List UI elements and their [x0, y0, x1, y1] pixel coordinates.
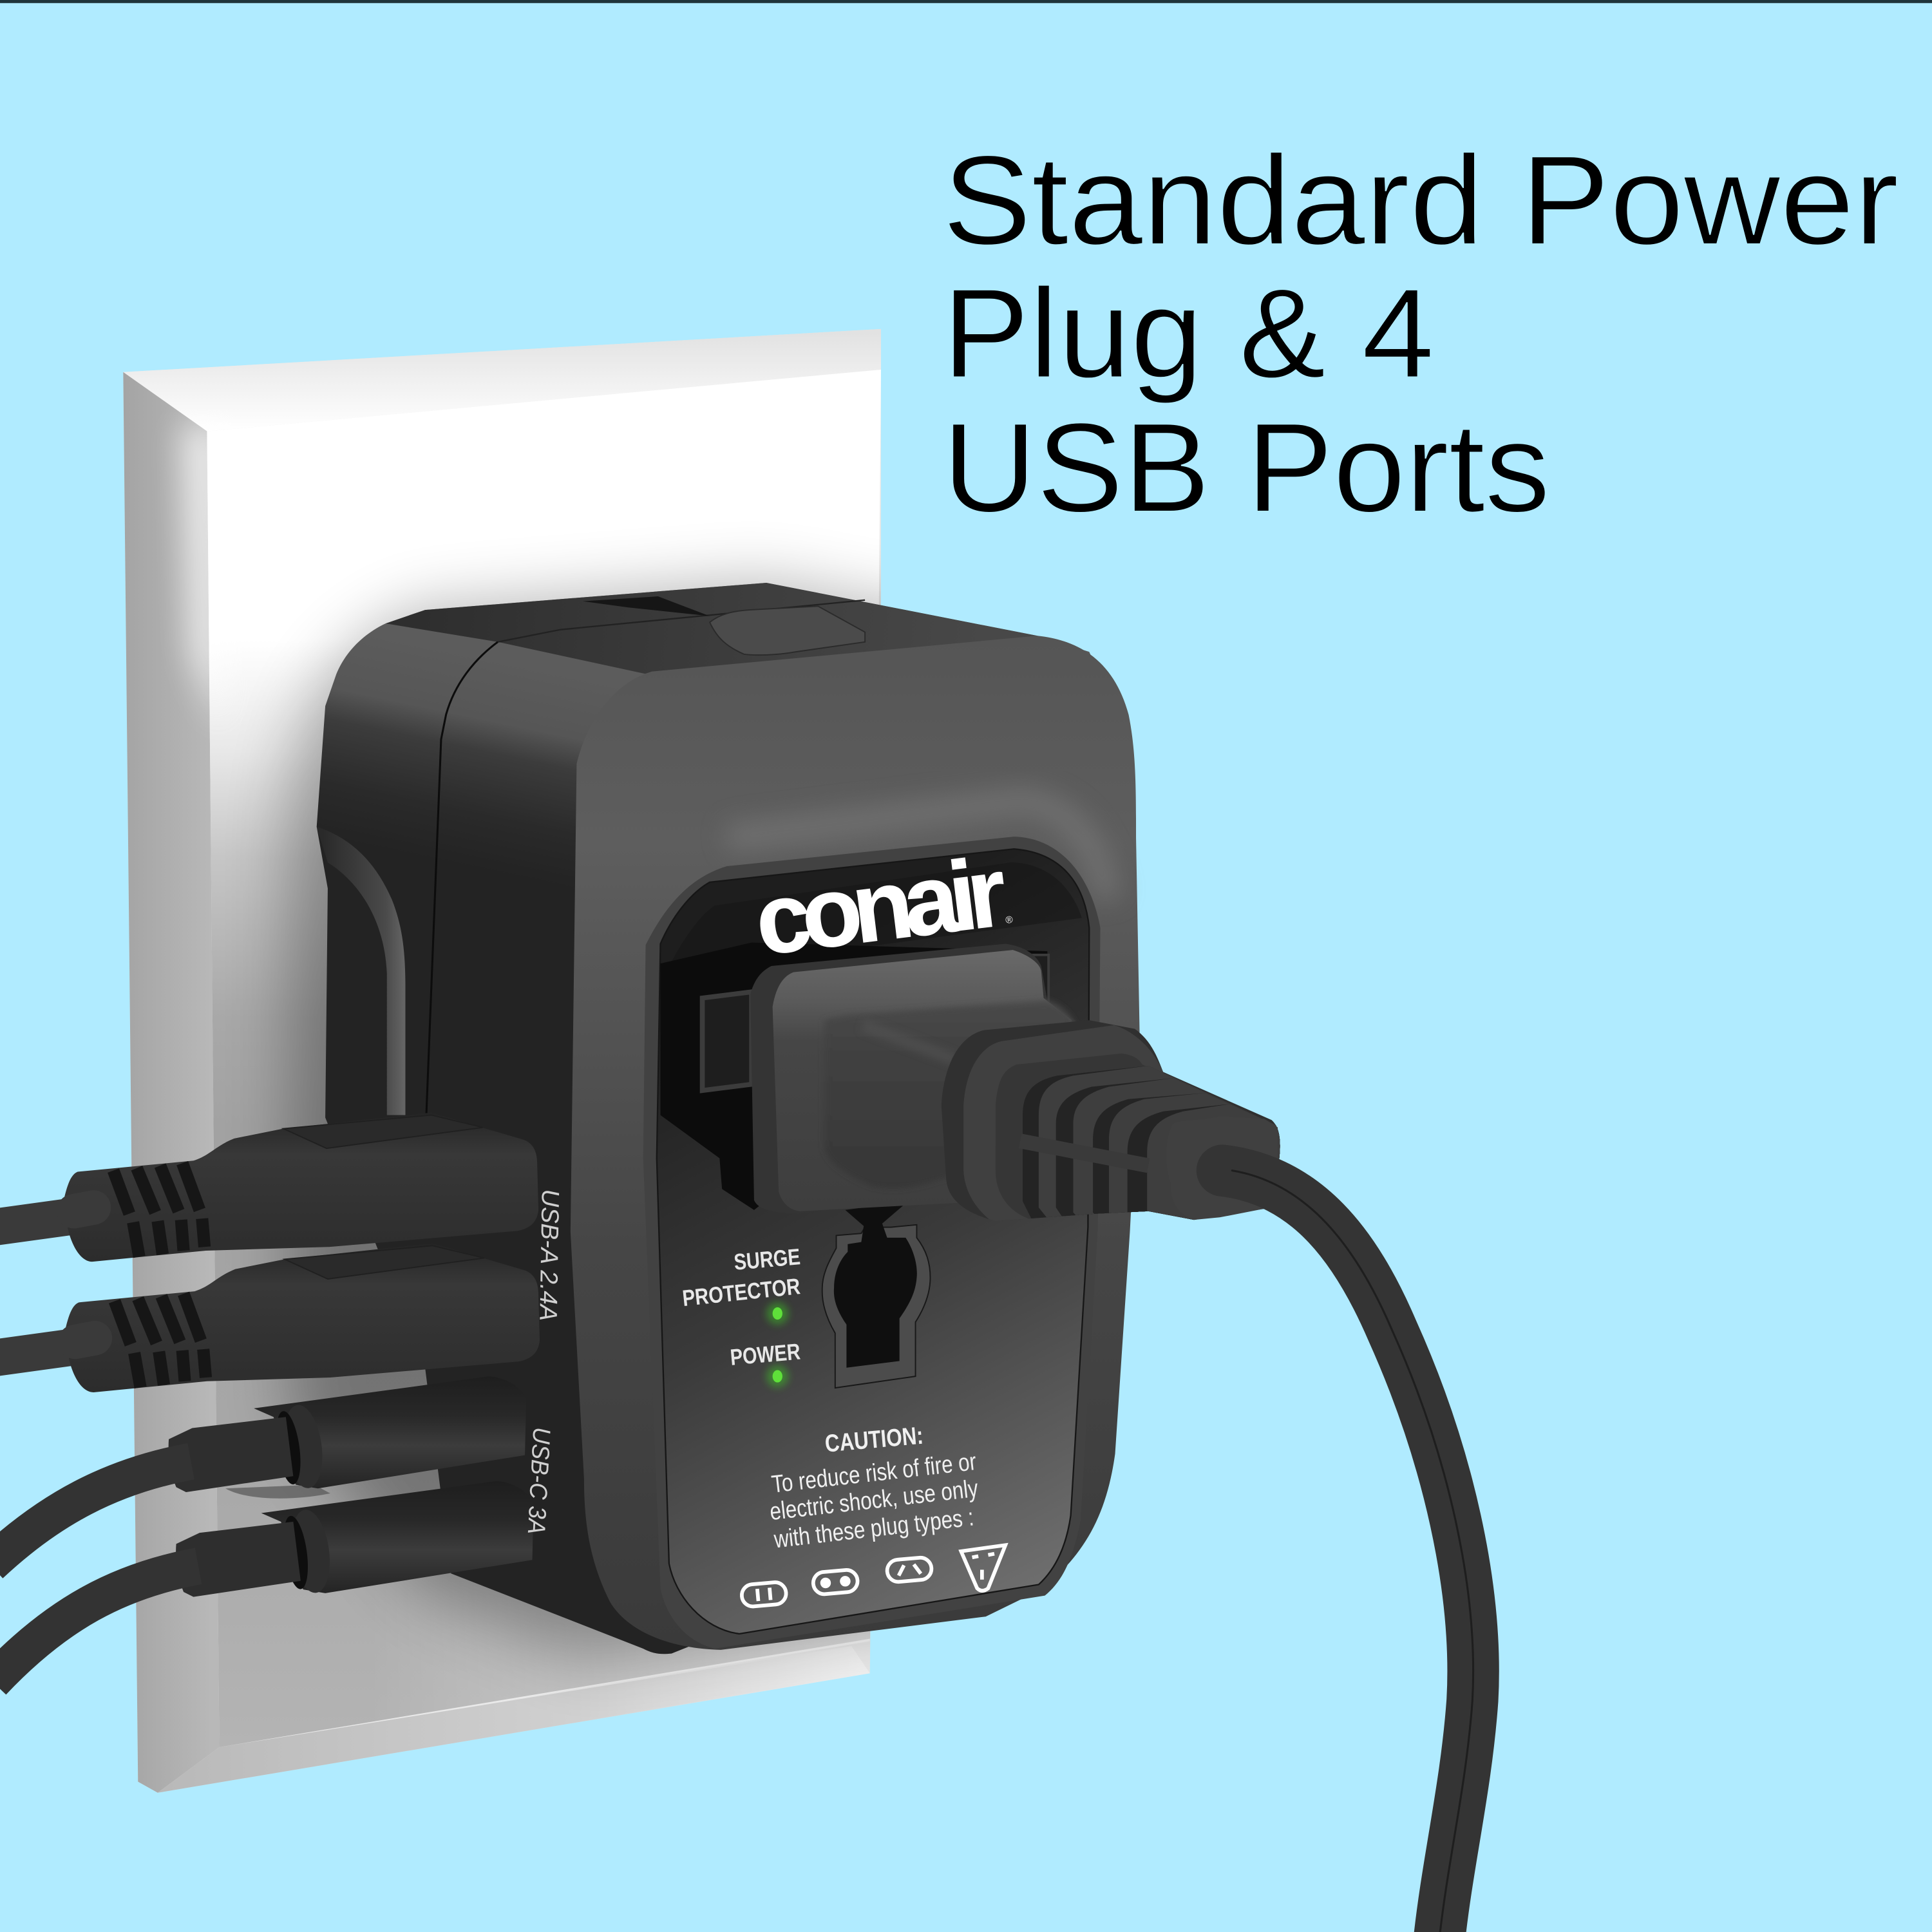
bevel glow: [182, 425, 222, 727]
cable entry: [74, 1208, 93, 1211]
protector label: PROTECTOR: [681, 1274, 801, 1311]
rib spine: [1020, 1141, 1148, 1166]
end cap: [1166, 1116, 1278, 1220]
inset badge: [285, 1245, 484, 1279]
caution text: To reduce risk of fire or: [770, 1448, 978, 1499]
front face: [571, 636, 1140, 1650]
front face highlight: [727, 801, 1109, 900]
top surface: [386, 583, 1037, 675]
cable entry: [75, 1338, 95, 1342]
top seam: [498, 600, 865, 642]
strain relief: [936, 1016, 1287, 1226]
rib 3: [1093, 1093, 1282, 1226]
slider button: [710, 606, 865, 655]
narrow collar: [176, 1522, 301, 1597]
rib 1: [1023, 1066, 1282, 1226]
top border line: [0, 0, 1932, 3]
plug outer body: [750, 944, 1097, 1214]
upper socket recess: [661, 943, 1050, 1210]
power label: POWER: [729, 1339, 801, 1370]
wall plate: [123, 328, 881, 1793]
rear recessed lip: [317, 827, 405, 1115]
panel gloss top: [665, 862, 1082, 973]
title: USB Ports: [943, 397, 1550, 538]
cable: [0, 1214, 92, 1227]
rib 2: [1056, 1078, 1282, 1226]
ribs: [113, 1163, 205, 1257]
sleeve: [254, 1376, 526, 1488]
power plug with strain relief: [750, 944, 1473, 1932]
adapter shadow on plate: [255, 549, 881, 1689]
lower face light: [370, 1479, 870, 1723]
sleeve: [261, 1481, 533, 1593]
cable: [0, 1344, 93, 1358]
upper socket slot outline: [703, 992, 752, 1090]
surge label: SURGE: [733, 1244, 801, 1275]
USB-A label: USB-A 2.4A: [534, 1189, 564, 1321]
USB-C connector lower: [0, 1481, 533, 1682]
narrow collar: [169, 1417, 293, 1492]
USB-C connector upper: [0, 1376, 526, 1565]
title: Plug & 4: [943, 262, 1434, 404]
caution text: with these plug types :: [772, 1503, 975, 1554]
cable: [0, 1566, 198, 1682]
plug neck: [824, 1001, 1075, 1188]
travel adapter body: [317, 583, 1140, 1654]
ribs: [115, 1294, 206, 1387]
USB-A connector lower: [0, 1243, 540, 1392]
title: [943, 129, 1899, 538]
boot: [64, 1113, 538, 1262]
plate top bevel: [123, 329, 881, 431]
USB-C label: USB-C 3A: [522, 1426, 555, 1535]
USB-A connector upper: [0, 1113, 538, 1262]
caution text: [768, 1422, 980, 1554]
icon: plug type G triangle: [961, 1545, 1005, 1591]
inset badge: [283, 1115, 483, 1148]
caution text: electric shock, use only: [768, 1475, 980, 1526]
collar ring outer: [936, 1016, 1287, 1226]
logo: ®: [1005, 914, 1014, 926]
surge LED: [766, 1302, 788, 1325]
plate left bevel: [123, 372, 220, 1793]
sleeve ring: [287, 1507, 335, 1595]
sleeve ring: [279, 1403, 327, 1491]
collar ring third: [996, 1054, 1282, 1226]
plate outline: [123, 329, 881, 1793]
connector shadow on plate: [225, 1484, 330, 1499]
slider slot: [583, 596, 710, 616]
icon: plug type A: [741, 1582, 787, 1607]
icon: plug type C: [812, 1569, 858, 1595]
cable: [0, 1461, 191, 1565]
panel rim: [643, 837, 1101, 1649]
power LED: [766, 1365, 788, 1387]
collar ring second: [963, 1025, 1163, 1221]
plate face: [207, 370, 881, 1747]
keyhole frame: [822, 1225, 931, 1388]
shell seam: [426, 642, 498, 1115]
logo: conair: [750, 836, 1012, 976]
power cord: [1222, 1171, 1473, 1932]
inset panel: [657, 849, 1089, 1634]
sleeve hole: [279, 1514, 312, 1591]
title: Standard Power: [943, 129, 1899, 271]
caution text: CAUTION:: [824, 1422, 924, 1458]
right socket slot: [1023, 955, 1048, 1004]
lower keyhole socket: [822, 1201, 931, 1388]
rib 4: [1128, 1104, 1282, 1226]
icon: plug type I: [886, 1557, 933, 1583]
plug face: [773, 950, 1072, 1211]
plate bottom bevel: [158, 1646, 870, 1793]
neck ridge: [862, 1025, 955, 1059]
boot: [65, 1243, 540, 1392]
back shell: [317, 583, 1129, 1654]
sleeve hole: [272, 1410, 305, 1486]
keyhole cavity: [834, 1201, 917, 1368]
